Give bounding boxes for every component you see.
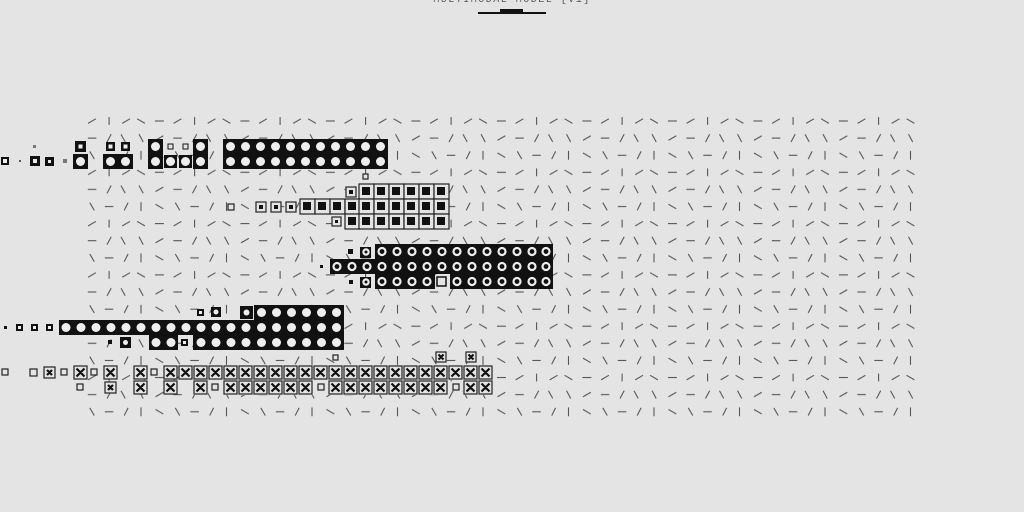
band 2: square blocks <box>228 174 449 229</box>
dash field background <box>84 112 924 420</box>
title <box>433 0 591 14</box>
band 1: circle blocks <box>1 139 388 169</box>
band 4: circle blocks <box>4 305 344 350</box>
band 3: ring blocks <box>320 244 553 289</box>
band 5: x blocks <box>2 352 493 395</box>
